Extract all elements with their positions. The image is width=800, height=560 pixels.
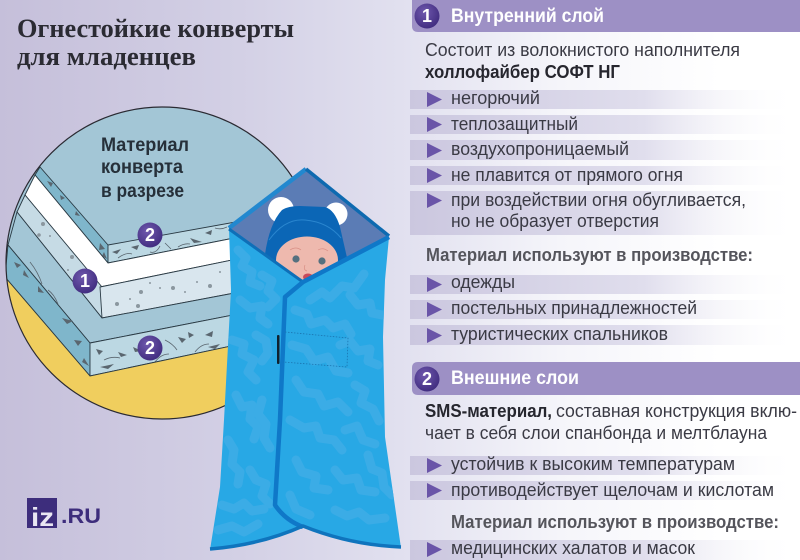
envelope flap and edges	[210, 169, 401, 549]
cross-section caption: Материал	[101, 134, 189, 156]
property list: негорючий	[451, 88, 540, 108]
property list: воздухопроницаемый	[451, 139, 629, 159]
property list: устойчив к высоким температурам	[451, 454, 735, 474]
panel: outer layers	[410, 362, 800, 560]
badge: upper layer 2	[138, 222, 162, 248]
intro text	[425, 401, 797, 443]
property list: теплозащитный	[451, 114, 578, 134]
material cross-section circle	[5, 106, 292, 420]
camouflage pattern	[218, 250, 392, 532]
strap	[277, 335, 280, 364]
property list	[410, 454, 800, 500]
badge: layer 1	[72, 268, 98, 294]
intro text: составная конструкция вклю-	[556, 401, 797, 421]
upper outer layer	[34, 166, 234, 262]
property list	[410, 88, 800, 235]
heading: inner layer: 1	[422, 6, 432, 26]
white layer	[24, 174, 230, 286]
logo: .RU	[61, 505, 101, 528]
heading: outer layers	[412, 362, 800, 395]
heading: outer layers: 2	[422, 369, 432, 389]
badge: layer 1: 1	[80, 271, 90, 291]
usage list: медицинских халатов и масок	[451, 538, 695, 558]
envelope body	[210, 228, 401, 550]
envelope with baby	[210, 169, 401, 550]
heading: inner layer	[412, 0, 800, 32]
badge: lower layer 2	[138, 336, 162, 360]
usage list: туристических спальников	[451, 324, 668, 344]
usage list	[410, 272, 800, 345]
cross-section caption: в разрезе	[101, 180, 184, 202]
cross-section caption	[101, 134, 189, 202]
lower outer layer	[6, 244, 230, 376]
heading: inner layer: Внутренний слой	[451, 5, 604, 27]
heading: outer layers: Внешние слои	[451, 367, 579, 389]
panel: inner layer	[410, 0, 800, 345]
property list: не плавится от прямого огня	[451, 165, 683, 185]
title: для младенцев	[17, 41, 196, 71]
badge: upper layer 2: 2	[145, 225, 155, 245]
plain teal layer	[8, 211, 231, 342]
intro text	[425, 40, 740, 82]
property list: при воздействии огня обугливается,	[451, 190, 746, 210]
intro text: SMS-материал,	[425, 401, 552, 421]
property list: противодействует щелочам и кислотам	[451, 480, 774, 500]
inner layer with speckles	[16, 194, 231, 318]
title	[17, 13, 294, 71]
baby	[264, 197, 348, 284]
badge: lower layer 2: 2	[145, 338, 155, 358]
title: Огнестойкие конверты	[17, 13, 294, 43]
logo	[27, 498, 101, 532]
pocket	[283, 332, 348, 367]
yellow surface	[8, 279, 228, 418]
hood interior	[230, 170, 388, 282]
usage list: постельных принадлежностей	[451, 298, 697, 318]
usage list: одежды	[451, 272, 515, 292]
usage heading: Материал используют в производстве:	[426, 245, 753, 265]
intro text: холлофайбер СОФТ НГ	[425, 62, 620, 82]
intro text: чает в себя слои спанбонда и мелтблауна	[425, 423, 768, 443]
intro text: Состоит из волокнистого наполнителя	[425, 40, 740, 60]
usage heading: Материал используют в производстве:	[451, 512, 779, 532]
logo: iz	[31, 502, 54, 532]
usage list	[410, 538, 800, 560]
cross-section caption: конверта	[101, 156, 183, 178]
property list: но не образует отверстия	[451, 211, 659, 231]
